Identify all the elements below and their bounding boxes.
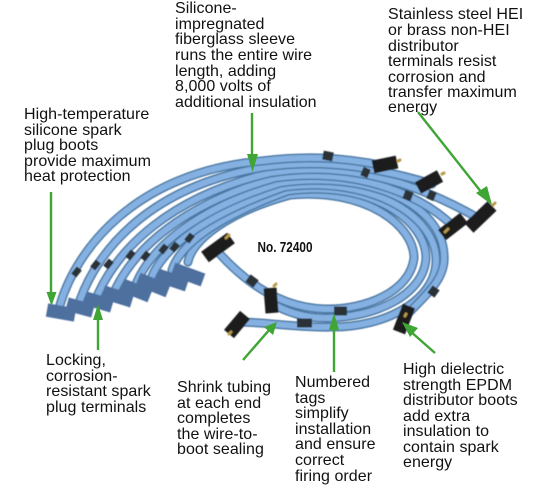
callout: shrink tubing: Shrink tubing [177,379,271,396]
callout: plug terminals: corrosion- [46,368,118,385]
callout: silicone boots: silicone spark [24,122,123,139]
callout: EPDM boots [403,361,518,471]
callout: terminals [388,6,523,116]
part number: No. 72400 [258,239,312,256]
callout: fiberglass sleeve [175,0,317,111]
callout: terminals: corrosion and [388,69,486,86]
callout: silicone boots [24,106,151,185]
callout: terminals: Stainless steel HEI [388,6,523,23]
wire set product photo [47,155,495,334]
brass terminals [226,160,495,334]
callout: numbered tags: installation [295,421,371,438]
arrow: fiberglass sleeve [247,113,258,172]
callout: numbered tags: firing order [295,468,373,485]
callout: shrink tubing: the wire-to- [177,426,258,443]
callout: shrink tubing: completes [177,410,250,427]
callout: numbered tags: simplify [295,405,349,422]
callout: EPDM boots: contain spark [403,439,500,456]
callout: numbered tags: tags [295,390,325,407]
wires [60,158,478,327]
callout: numbered tags: and ensure [295,436,376,453]
black distributor boots [205,162,492,334]
callout: EPDM boots: add extra [403,408,470,425]
callout: terminals: transfer maximum [388,84,517,101]
callout: shrink tubing [177,379,271,458]
callout: plug terminals: plug terminals [46,399,146,416]
arrow: EPDM boots [402,322,435,353]
callout: silicone boots: provide maximum [24,153,151,170]
numbered tags and shrink tubing [74,155,437,323]
callout: EPDM boots: distributor boots [403,392,518,409]
callout: fiberglass sleeve: 8,000 volts of [175,78,271,95]
callout: EPDM boots: High dielectric [403,361,504,378]
callout: shrink tubing: boot sealing [177,441,264,458]
callout: numbered tags: correct [295,452,345,469]
callout: silicone boots: High-temperature [24,106,149,123]
callout: terminals: terminals resist [388,53,497,70]
callout: fiberglass sleeve: impregnated [175,16,264,33]
callout: terminals: energy [388,99,437,116]
spark plug boots [47,269,203,315]
arrow: silicone boots [46,192,56,306]
callout: fiberglass sleeve: fiberglass sleeve [175,31,295,48]
arrow: numbered tags [329,313,339,372]
callout: EPDM boots: strength EPDM [403,377,512,394]
callout: fiberglass sleeve: Silicone- [175,0,237,17]
arrow: plug terminals [93,304,103,350]
callout: EPDM boots: energy [403,454,452,471]
callout: fiberglass sleeve: additional insulation [175,94,317,111]
callout: shrink tubing: at each end [177,395,261,412]
arrow: shrink tubing [243,322,277,360]
callout: EPDM boots: insulation to [403,423,489,440]
callout: numbered tags [295,374,376,485]
arrow: terminals [418,112,492,205]
callout: silicone boots: plug boots [24,137,98,154]
callout: plug terminals: resistant spark [46,383,152,400]
callout: numbered tags: Numbered [295,374,370,391]
callout: terminals: or brass non-HEI [388,22,510,39]
callout: fiberglass sleeve: length, adding [175,63,276,80]
callout: plug terminals: Locking, [46,352,106,369]
callout: terminals: distributor [388,38,459,55]
callout: fiberglass sleeve: runs the entire wire [175,47,312,64]
callout: plug terminals [46,352,152,416]
callout: silicone boots: heat protection [24,168,131,185]
